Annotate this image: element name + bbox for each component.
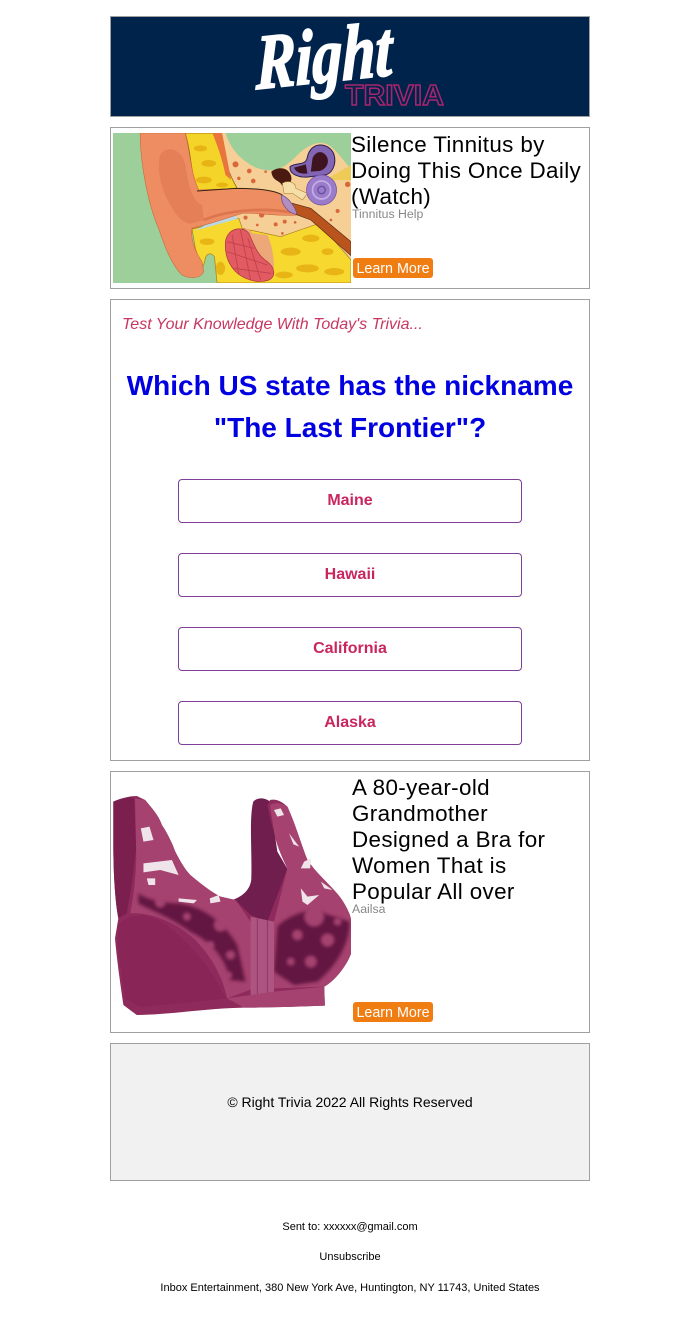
garment body <box>113 796 352 1015</box>
sponsor name: Aailsa <box>352 902 386 916</box>
answer option: California: California <box>313 640 387 657</box>
ad image: burgundy lace bra <box>113 796 351 1015</box>
panel: trivia quiz <box>110 299 590 761</box>
ad headline: (Watch) <box>351 184 431 209</box>
learn more button: Learn More <box>356 1005 430 1021</box>
back band <box>232 798 289 923</box>
copyright text: © Right Trivia 2022 All Rights Reserved <box>227 1094 473 1110</box>
ad headline: Doing This Once Daily <box>351 158 581 183</box>
ad headline: Popular All over <box>352 879 515 904</box>
ad headline <box>352 775 545 904</box>
lace highlights <box>141 808 333 905</box>
question heading <box>126 370 573 443</box>
question heading: Which US state has the nickname <box>127 370 573 401</box>
panel: bra ad <box>110 771 590 1033</box>
question heading: "The Last Frontier"? <box>214 412 486 443</box>
panel: copyright footer <box>110 1043 590 1181</box>
ad headline <box>351 132 581 209</box>
postal address: Inbox Entertainment, 380 New York Ave, Huntington, NY 11743, United States <box>160 1282 540 1294</box>
right lace <box>270 803 352 988</box>
sponsor name: Tinnitus Help <box>352 207 423 221</box>
sent to line: Sent to: xxxxxx@gmail.com <box>282 1221 418 1233</box>
ad headline: A 80-year-old <box>352 775 490 800</box>
lower band <box>227 987 325 1008</box>
center closure <box>251 917 274 998</box>
panel: tinnitus ad <box>110 127 590 289</box>
left lace <box>130 798 254 998</box>
answer option: Maine: Maine <box>327 492 373 509</box>
intro line: Test Your Knowledge With Today's Trivia... <box>122 316 423 333</box>
unsubscribe link: Unsubscribe <box>319 1251 381 1263</box>
ad headline: Grandmother <box>352 801 488 826</box>
logo <box>255 17 444 112</box>
left strap <box>113 797 136 918</box>
answer option: Maine <box>178 479 522 523</box>
ad image: ear anatomy illustration <box>113 133 351 283</box>
ad headline: Women That is <box>352 853 507 878</box>
left cup <box>117 916 227 1007</box>
answer option: California <box>178 627 522 671</box>
answer option: Hawaii: Hawaii <box>325 566 375 583</box>
ad headline: Silence Tinnitus by <box>351 132 545 157</box>
answer option: Alaska <box>178 701 522 745</box>
logo: TRIVIA <box>345 80 444 112</box>
learn more button: Learn More <box>356 261 430 277</box>
header banner: Right Trivia logo <box>110 16 590 117</box>
ad headline: Designed a Bra for <box>352 827 545 852</box>
answer option: Alaska: Alaska <box>324 714 376 731</box>
answer option: Hawaii <box>178 553 522 597</box>
